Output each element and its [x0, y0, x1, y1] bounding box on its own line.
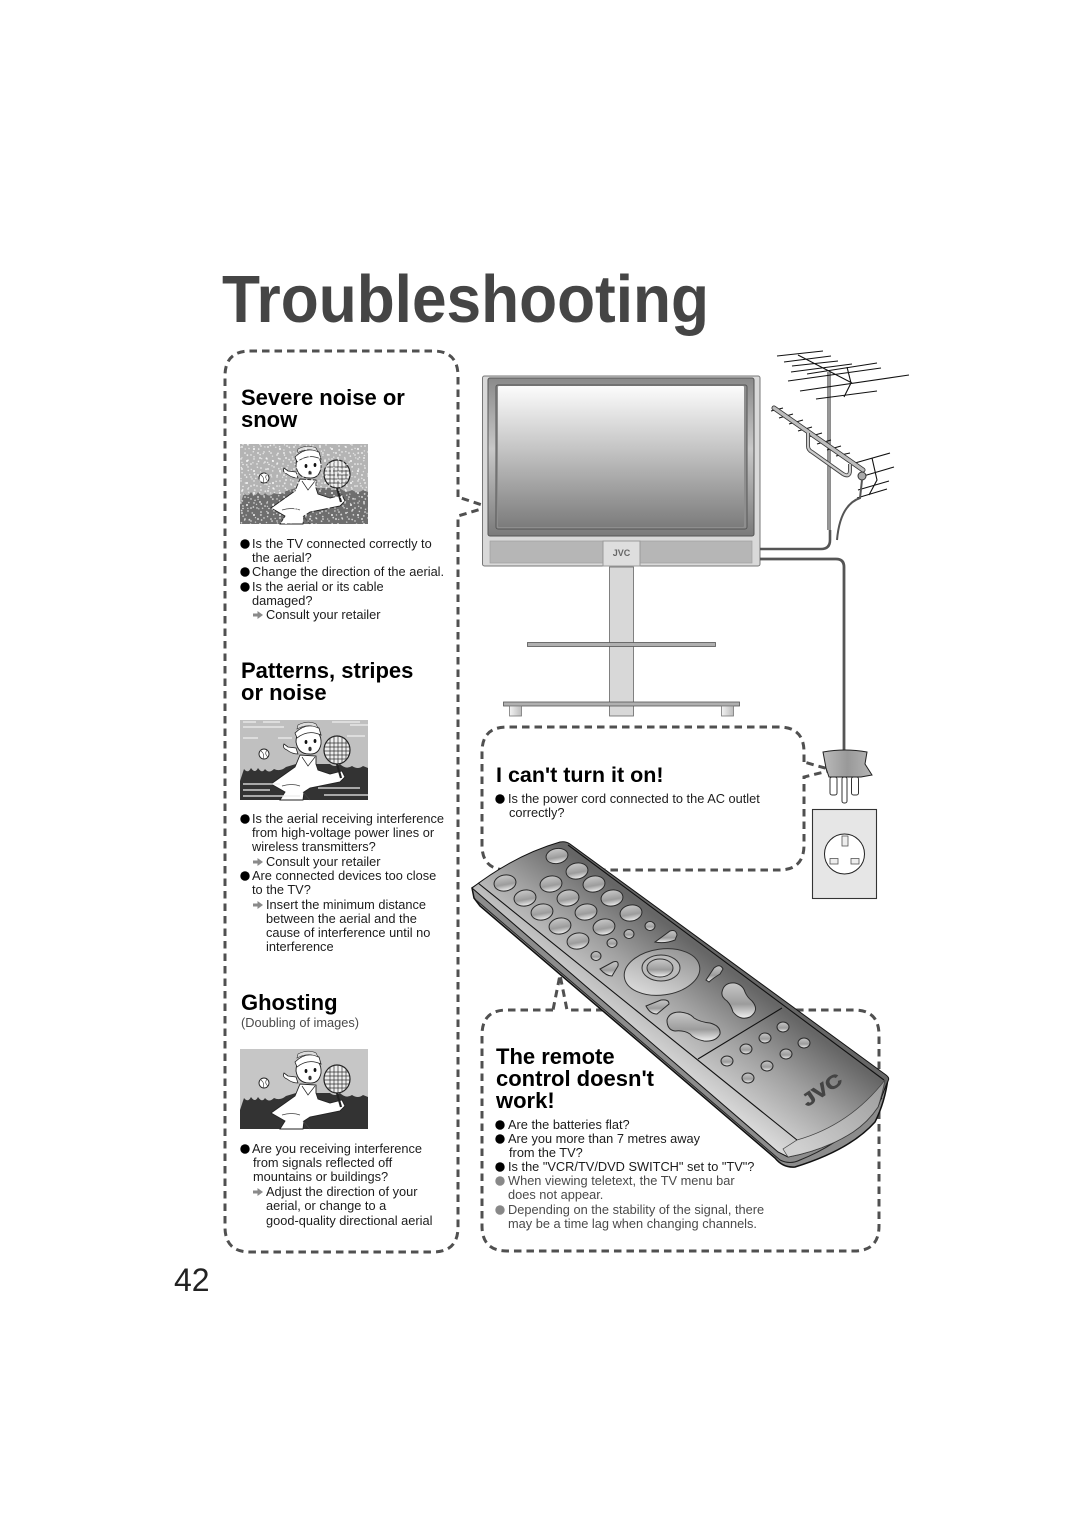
page number: 42	[174, 1262, 210, 1298]
text: snow checklist: Change the direction of the aerial.	[252, 564, 444, 579]
text: snow checklist: Consult your retailer	[266, 607, 381, 622]
text: power checklist: correctly?	[509, 805, 564, 820]
text: ghosting checklist: from signals reflected off	[253, 1155, 393, 1170]
illustration: wall socket	[812, 810, 876, 898]
text: remote checklist: Are you more than 7 metres away	[508, 1131, 701, 1146]
text: stripes checklist: from high-voltage power lines or	[252, 825, 435, 840]
remote face	[472, 842, 889, 1157]
image: stripes picture	[240, 720, 368, 800]
illustration: mains plug	[823, 750, 872, 803]
image: ghosting picture	[240, 1049, 368, 1129]
heading: patterns	[241, 658, 413, 705]
illustration: lower aerial	[771, 408, 894, 540]
heading: severe noise	[241, 385, 405, 432]
text: ghosting subtitle: (Doubling of images)	[241, 1015, 359, 1030]
illustration: TV stand	[504, 567, 740, 716]
text: snow checklist	[240, 536, 444, 622]
panel: remote dashed bubble	[482, 975, 879, 1251]
text: remote checklist: Is the "VCR/TV/DVD SWITCH" set to "TV"?	[508, 1159, 754, 1174]
heading: patterns: Patterns, stripes	[241, 658, 413, 683]
title: Troubleshooting	[222, 262, 709, 337]
heading: severe noise: snow	[241, 407, 298, 432]
text: ghosting checklist	[240, 1141, 432, 1228]
text: stripes checklist: Insert the minimum distance	[266, 897, 426, 912]
heading: patterns: or noise	[241, 680, 327, 705]
text: stripes checklist: Is the aerial receiving interference	[252, 811, 444, 826]
text: remote checklist: When viewing teletext, the TV menu bar	[508, 1173, 735, 1188]
text: ghosting checklist: mountains or buildings?	[253, 1169, 388, 1184]
text: snow checklist: the aerial?	[252, 550, 312, 565]
remote upper buttons	[493, 847, 723, 1014]
heading: ghosting: Ghosting	[241, 990, 338, 1015]
remote underside	[472, 870, 888, 1167]
remote lower buttons	[721, 1022, 810, 1083]
cable: power lead	[760, 559, 844, 752]
heading: can't turn on: I can't turn it on!	[496, 763, 664, 787]
text: ghosting checklist: good-quality directional aerial	[266, 1213, 432, 1228]
text: stripes checklist: to the TV?	[252, 882, 311, 897]
heading: remote doesn't work	[495, 1044, 655, 1113]
text: stripes checklist: wireless transmitters?	[251, 839, 376, 854]
image: snow picture	[240, 444, 368, 524]
heading: remote doesn't work: The remote	[496, 1044, 615, 1069]
text: remote checklist: Depending on the stability of the signal, there	[508, 1202, 764, 1217]
text: snow checklist: Is the TV connected correctly to	[252, 536, 432, 551]
remote end cap	[783, 1080, 885, 1157]
text: remote checklist: may be a time lag when changing channels.	[508, 1216, 757, 1231]
text: power checklist	[495, 791, 760, 820]
text: snow checklist: damaged?	[252, 593, 312, 608]
text: remote checklist	[495, 1117, 764, 1231]
text: remote checklist: from the TV?	[509, 1145, 583, 1160]
illustration: TV	[482, 376, 760, 566]
heading: remote doesn't work: control doesn't	[496, 1066, 655, 1091]
remote directional pad	[621, 944, 703, 1000]
text: remote checklist: Are the batteries flat?	[508, 1117, 630, 1132]
remote logo: JVC	[798, 1069, 846, 1111]
text: stripes checklist: Are connected devices too close	[252, 868, 436, 883]
remote volume rocker	[722, 983, 756, 1018]
text: stripes checklist: interference	[266, 939, 334, 954]
text: ghosting checklist: Are you receiving interference	[252, 1141, 422, 1156]
text: stripes checklist: cause of interference until no	[266, 925, 430, 940]
text: snow checklist: Is the aerial or its cable	[252, 579, 384, 594]
heading: severe noise: Severe noise or	[241, 385, 405, 410]
text: remote checklist: does not appear.	[508, 1187, 603, 1202]
text: stripes checklist	[240, 811, 444, 954]
text: ghosting checklist: Adjust the direction of your	[266, 1184, 418, 1199]
cable: aerial to TV	[760, 530, 830, 549]
panel: power dashed bubble	[482, 727, 832, 870]
illustration: upper aerial	[777, 351, 909, 530]
text: stripes checklist: between the aerial and the	[266, 911, 417, 926]
text: power checklist: Is the power cord connected to the AC outlet	[508, 791, 760, 806]
text: ghosting checklist: aerial, or change to a	[266, 1198, 387, 1213]
text: stripes checklist: Consult your retailer	[266, 854, 381, 869]
panel: left dashed bubble	[225, 351, 488, 1252]
illustration: remote control	[472, 842, 889, 1167]
illustration: TV: JVC	[613, 548, 631, 558]
heading: remote doesn't work: work!	[495, 1088, 555, 1113]
remote channel rocker	[667, 1012, 720, 1041]
